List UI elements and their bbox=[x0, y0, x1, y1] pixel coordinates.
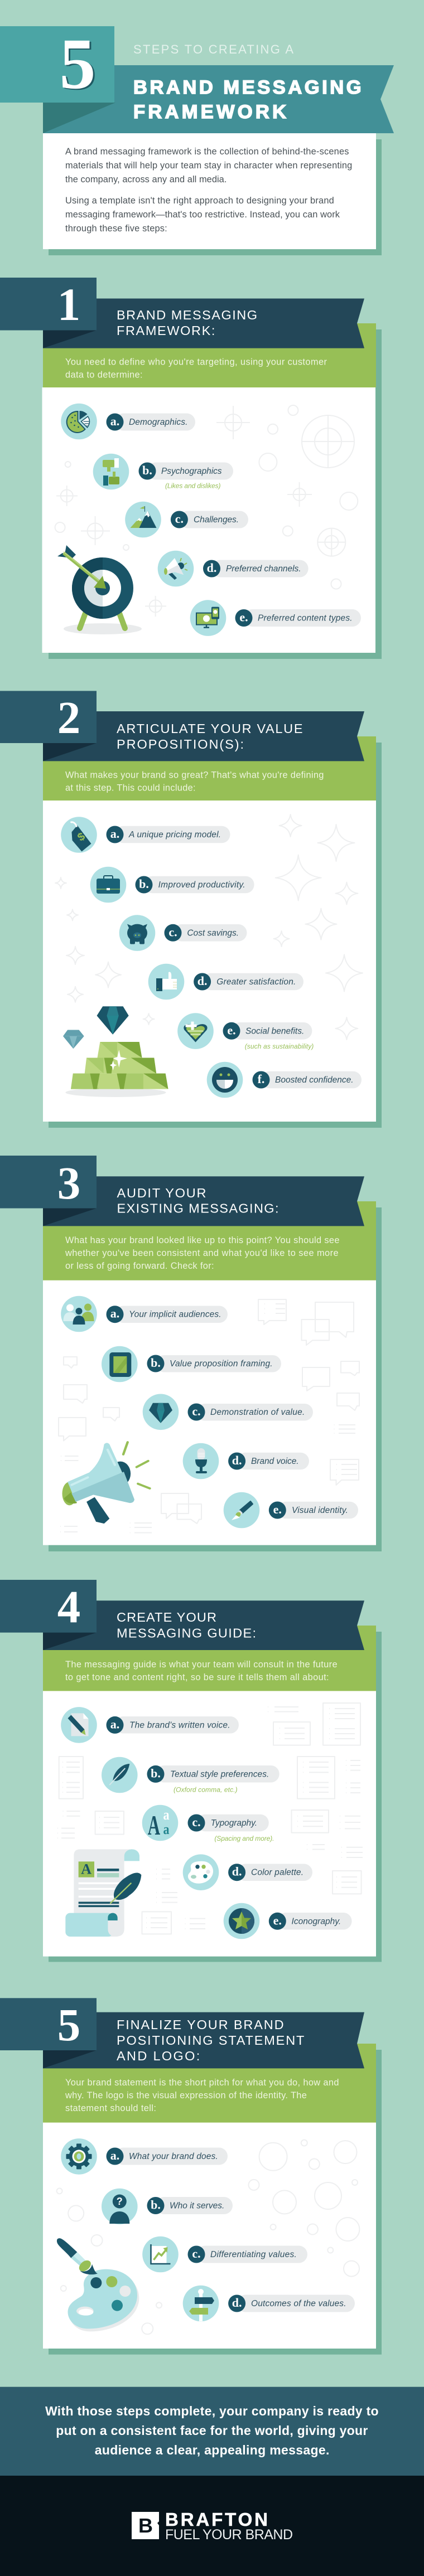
label a: Your implicit audiences. bbox=[129, 1310, 221, 1319]
step 5 intro text: Your brand statement is the short pitch for what you do, how and bbox=[65, 2078, 339, 2088]
step 1 heading: BRAND MESSAGING bbox=[117, 308, 257, 322]
item b: productivity bbox=[90, 867, 254, 903]
step 4 ribbon bbox=[43, 1600, 364, 1650]
icon: diamond bbox=[143, 1394, 179, 1430]
closing banner: audience a clear, appealing message. bbox=[95, 2443, 329, 2457]
title: BRAND MESSAGING bbox=[133, 77, 362, 98]
label e bbox=[269, 1502, 358, 1519]
ribbon fold bbox=[43, 103, 115, 133]
step 2 intro text: What makes your brand so great? That's what you're defining bbox=[65, 770, 324, 780]
label e: e. bbox=[273, 1913, 282, 1927]
label d: d. bbox=[232, 1453, 242, 1467]
label a: A unique pricing model. bbox=[128, 830, 221, 840]
icon: letters Aa: a bbox=[163, 1822, 170, 1837]
step 1 number: 1 bbox=[57, 279, 80, 330]
step 4 heading: MESSAGING GUIDE: bbox=[117, 1626, 256, 1640]
step 4 heading bbox=[117, 1610, 256, 1640]
label d: Preferred channels. bbox=[226, 564, 301, 574]
title: FRAMEWORK bbox=[133, 101, 286, 123]
label b: b. bbox=[151, 1356, 161, 1370]
icon: microphone bbox=[183, 1443, 219, 1479]
step 3 bbox=[0, 1156, 382, 1551]
item c: differentiating values bbox=[142, 2237, 307, 2272]
label e bbox=[235, 609, 361, 627]
step 4 bbox=[0, 1580, 382, 1962]
closing banner: With those steps complete, your company is ready to bbox=[45, 2404, 379, 2418]
label a: a. bbox=[110, 414, 119, 428]
item a: what your brand does bbox=[61, 2138, 228, 2175]
step 1 ribbon bbox=[43, 299, 364, 348]
title bbox=[133, 77, 362, 123]
icon: letters Aa bbox=[142, 1805, 178, 1841]
label a: a. bbox=[110, 1717, 119, 1731]
step 2 heading: PROPOSITION(S): bbox=[117, 737, 244, 751]
label c: c. bbox=[175, 512, 184, 526]
icon: growth chart bbox=[142, 2237, 179, 2272]
intro panel: A brand messaging framework is the collection of behind-the-scenes bbox=[65, 147, 349, 157]
icon: gear bbox=[61, 2138, 97, 2175]
label a bbox=[106, 1716, 239, 1734]
step 3 intro text: whether you've been consistent and what you'd like to see more bbox=[65, 1248, 339, 1258]
subtitle: STEPS TO CREATING A bbox=[133, 42, 293, 56]
step 3 number: 3 bbox=[57, 1157, 80, 1209]
step 1 intro text: data to determine: bbox=[65, 370, 143, 380]
step 4 intro text: to get tone and content right, so be sure it tells them all about: bbox=[65, 1672, 329, 1682]
title ribbon bbox=[43, 65, 394, 133]
step 5 intro text: statement should tell: bbox=[65, 2103, 156, 2113]
logo mark bbox=[132, 2512, 159, 2539]
label b: b. bbox=[142, 463, 152, 477]
label c: c. bbox=[192, 2247, 201, 2260]
big number 5: 5 bbox=[59, 24, 96, 104]
label b bbox=[135, 876, 254, 893]
step 3 ribbon bbox=[43, 1176, 364, 1226]
illustration: target with arrow bbox=[57, 545, 142, 634]
step 5 heading bbox=[117, 2017, 304, 2063]
label b bbox=[147, 1765, 280, 1783]
note: spacing: (Spacing and more). bbox=[214, 1835, 274, 1842]
item a: audiences bbox=[61, 1296, 228, 1332]
label b: Psychographics bbox=[161, 467, 222, 476]
label d: d. bbox=[207, 561, 216, 575]
label d: Color palette. bbox=[251, 1868, 303, 1878]
icon: briefcase bbox=[90, 867, 126, 903]
icon: paint brush bbox=[224, 1492, 259, 1528]
step 5 intro text bbox=[65, 2078, 339, 2113]
label e bbox=[223, 1022, 312, 1040]
label e: e. bbox=[239, 610, 248, 624]
illustration: gold bars and diamonds bbox=[63, 1006, 168, 1097]
label c: Challenges. bbox=[194, 515, 239, 525]
item b: Psychographics bbox=[93, 454, 233, 490]
label a: The brand's written voice. bbox=[129, 1720, 230, 1730]
label e bbox=[269, 1913, 352, 1930]
step 5 intro text: why. The logo is the visual expression of the identity. The bbox=[65, 2090, 307, 2100]
icon: piggy bank bbox=[119, 915, 155, 951]
step 3 heading: EXISTING MESSAGING: bbox=[117, 1201, 279, 1215]
label f: Boosted confidence. bbox=[275, 1075, 354, 1085]
closing banner bbox=[0, 2387, 424, 2476]
item a: written voice bbox=[61, 1707, 239, 1743]
item f: confidence bbox=[207, 1062, 362, 1098]
step 1 intro text bbox=[65, 357, 327, 380]
item c: cost savings bbox=[119, 915, 247, 951]
label d bbox=[228, 1864, 312, 1881]
step 1 intro text: You need to define who you're targeting, using your customer bbox=[65, 357, 327, 367]
label b: Who it serves. bbox=[170, 2201, 224, 2211]
label d: Greater satisfaction. bbox=[216, 977, 296, 987]
label c: c. bbox=[168, 925, 177, 939]
step 4 intro text: The messaging guide is what your team will consult in the future bbox=[65, 1660, 338, 1670]
label c bbox=[187, 1814, 269, 1832]
step 3 intro text: or less of going forward. Check for: bbox=[65, 1261, 214, 1271]
label d: d. bbox=[232, 2296, 242, 2310]
icon: feather bbox=[102, 1757, 138, 1793]
intro panel shadow bbox=[49, 139, 382, 255]
label b: b. bbox=[151, 1766, 161, 1780]
label c: Differentiating values. bbox=[210, 2250, 297, 2259]
icon: mountains bbox=[125, 502, 161, 537]
icon: palette bbox=[183, 1854, 219, 1890]
icon: people bbox=[61, 1296, 97, 1332]
step 5 heading: AND LOGO: bbox=[117, 2049, 200, 2063]
step 3 intro text: What has your brand looked like up to this point? You should see bbox=[65, 1235, 339, 1245]
label e: Social benefits. bbox=[245, 1026, 304, 1036]
step 3 heading: AUDIT YOUR bbox=[117, 1186, 206, 1200]
label e: e. bbox=[227, 1023, 236, 1037]
icon: signpost bbox=[183, 2286, 219, 2321]
label a bbox=[106, 826, 230, 843]
label c: Demonstration of value. bbox=[210, 1408, 305, 1417]
note: such as sustainability: (such as sustainability) bbox=[245, 1042, 314, 1050]
item d: color palette bbox=[183, 1854, 312, 1890]
step 5 number: 5 bbox=[57, 1999, 80, 2050]
item d: satisfaction bbox=[148, 964, 303, 1000]
label b: b. bbox=[139, 877, 149, 891]
intro panel: messaging framework—that's too restrictive. Instead, you can work bbox=[65, 210, 340, 220]
step 5 heading: POSITIONING STATEMENT bbox=[117, 2033, 304, 2048]
label a: a. bbox=[110, 2148, 119, 2162]
item e: social benefits bbox=[177, 1013, 314, 1050]
item e: Preferred content types bbox=[190, 600, 361, 636]
label e: e. bbox=[273, 1502, 282, 1516]
label e: Preferred content types. bbox=[258, 613, 353, 623]
item b: who it serves bbox=[102, 2189, 233, 2224]
label d bbox=[228, 1453, 309, 1469]
label b: Improved productivity. bbox=[158, 880, 245, 890]
label b: Textual style preferences. bbox=[170, 1769, 269, 1779]
icon: thumbs up bbox=[148, 964, 184, 1000]
logo wordmark: FUEL YOUR BRAND bbox=[165, 2527, 293, 2543]
label b: Value proposition framing. bbox=[170, 1359, 273, 1369]
step 1 heading: FRAMEWORK: bbox=[117, 323, 215, 338]
step 2 heading bbox=[117, 721, 302, 751]
label d bbox=[194, 973, 303, 990]
icon: person with question mark bbox=[102, 2189, 138, 2224]
intro panel: Using a template isn't the right approach to designing your brand bbox=[65, 196, 334, 206]
label b bbox=[147, 2197, 233, 2214]
label a bbox=[106, 2147, 228, 2165]
intro panel: through these five steps: bbox=[65, 224, 167, 234]
icon: price tag: $ bbox=[75, 830, 88, 844]
step 1 bbox=[0, 278, 382, 659]
step 4 heading: CREATE YOUR bbox=[117, 1610, 216, 1624]
item e: visual identity bbox=[224, 1492, 358, 1528]
icon: star bbox=[224, 1903, 259, 1939]
step 4 intro text bbox=[65, 1660, 338, 1682]
icon: pencil and page bbox=[61, 1707, 97, 1743]
intro panel: materials that will help your team stay in character when representing bbox=[65, 161, 352, 171]
icon: letters Aa: a bbox=[163, 1807, 170, 1823]
illustration: megaphone bbox=[62, 1442, 150, 1524]
illustration: scroll and quill: A bbox=[81, 1861, 91, 1878]
logo wordmark bbox=[165, 2509, 293, 2543]
icon: pie chart bbox=[61, 404, 97, 439]
label f bbox=[252, 1071, 362, 1088]
item a: Demographics bbox=[61, 404, 195, 439]
label c: Cost savings. bbox=[187, 928, 239, 938]
label c: c. bbox=[192, 1404, 201, 1418]
step 4 number: 4 bbox=[57, 1581, 80, 1632]
label a: Demographics. bbox=[129, 418, 187, 427]
label c: c. bbox=[192, 1815, 201, 1829]
label c bbox=[187, 2245, 307, 2263]
label a: a. bbox=[110, 1307, 119, 1321]
item b: value framing bbox=[102, 1346, 281, 1382]
label a bbox=[106, 1306, 228, 1323]
label c bbox=[164, 924, 247, 942]
label a: a. bbox=[110, 827, 119, 841]
label d: Brand voice. bbox=[251, 1457, 299, 1466]
label e: Visual identity. bbox=[292, 1506, 348, 1515]
footer bbox=[0, 2476, 424, 2576]
big number 5: 5 bbox=[61, 25, 97, 105]
step 3 intro text bbox=[65, 1235, 339, 1271]
step 1 heading bbox=[117, 308, 257, 338]
step 2 intro text bbox=[65, 770, 324, 793]
icon: person with question mark: ? bbox=[117, 2196, 123, 2207]
step 2 bbox=[0, 691, 382, 1128]
item a: pricing bbox=[61, 817, 230, 853]
step 5 bbox=[0, 1998, 382, 2355]
step 2 heading: ARTICULATE YOUR VALUE bbox=[117, 721, 302, 736]
icon: thumbs bbox=[93, 454, 129, 489]
step 2 number bbox=[0, 691, 97, 743]
label a bbox=[106, 414, 195, 430]
label a: What your brand does. bbox=[129, 2152, 218, 2161]
icon: letters Aa: A bbox=[148, 1810, 160, 1841]
icon: price tag bbox=[61, 817, 97, 853]
label c: Typography. bbox=[211, 1818, 257, 1828]
item c: typography bbox=[142, 1805, 274, 1842]
step 5 ribbon bbox=[43, 2012, 364, 2068]
label f: f. bbox=[258, 1072, 264, 1086]
step 2 ribbon bbox=[43, 711, 364, 761]
label b: b. bbox=[151, 2197, 161, 2212]
label d: Outcomes of the values. bbox=[251, 2299, 346, 2308]
illustration: palette and brush bbox=[57, 2238, 139, 2331]
label d: d. bbox=[232, 1865, 242, 1879]
label b bbox=[138, 463, 233, 479]
number square bbox=[0, 26, 114, 103]
intro panel bbox=[43, 133, 376, 249]
icon: devices bbox=[190, 600, 226, 636]
note: likes and dislikes: (Likes and dislikes) bbox=[165, 482, 221, 490]
intro panel: the company, across any and all media. bbox=[65, 174, 227, 185]
step 5 number bbox=[0, 1998, 97, 2050]
item d: Preferred channels bbox=[158, 551, 309, 586]
label c bbox=[187, 1404, 313, 1420]
illustration: scroll and quill bbox=[65, 1849, 141, 1937]
item d: outcomes bbox=[183, 2286, 355, 2321]
step 4 number bbox=[0, 1580, 97, 1633]
logo mark: B bbox=[138, 2514, 153, 2537]
label b bbox=[147, 1355, 281, 1372]
icon: megaphone bbox=[158, 551, 194, 586]
step 3 heading bbox=[117, 1186, 279, 1215]
step 3 number bbox=[0, 1156, 97, 1209]
item d: brand voice bbox=[183, 1443, 309, 1479]
label d bbox=[228, 2294, 355, 2312]
step 2 number: 2 bbox=[57, 692, 80, 743]
item c: Challenges bbox=[125, 502, 248, 537]
label d: d. bbox=[197, 974, 207, 988]
step 1 number bbox=[0, 278, 97, 330]
item c: demonstration bbox=[143, 1394, 313, 1430]
note: oxford comma: (Oxford comma, etc.) bbox=[174, 1786, 238, 1794]
header bbox=[0, 24, 394, 255]
closing banner: put on a consistent face for the world, giving your bbox=[56, 2423, 368, 2438]
label c bbox=[171, 511, 248, 528]
label e: Iconography. bbox=[291, 1917, 341, 1926]
step 2 intro text: at this step. This could include: bbox=[65, 783, 196, 793]
item b: textual style bbox=[102, 1757, 280, 1794]
step 5 heading: FINALIZE YOUR BRAND bbox=[117, 2017, 284, 2032]
icon: heart bbox=[177, 1013, 214, 1049]
icon: smiley bbox=[207, 1062, 243, 1098]
icon: picture frame bbox=[102, 1346, 138, 1382]
item e: iconography bbox=[224, 1903, 352, 1939]
logo wordmark: BRAFTON bbox=[165, 2509, 268, 2530]
label d bbox=[203, 560, 309, 578]
